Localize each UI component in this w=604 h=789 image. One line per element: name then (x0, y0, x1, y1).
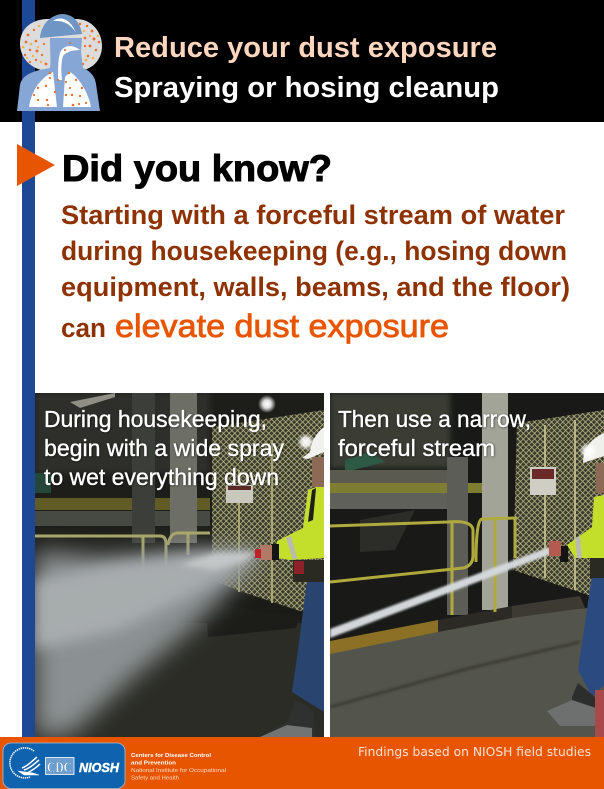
agency name text: Centers for Disease Control (131, 753, 211, 759)
header band (0, 0, 604, 122)
caption: narrow stream: forceful stream (338, 435, 495, 461)
text block: key message: Starting with a forceful stream of water (61, 200, 565, 230)
mesh fence (513, 410, 604, 595)
text block: key message (61, 200, 570, 344)
caption: narrow stream: Then use a narrow, (338, 406, 531, 432)
caption: narrow stream (338, 406, 531, 461)
arrow: orange triangle (17, 144, 55, 186)
text block: key message: can (61, 313, 106, 343)
water stream (330, 547, 551, 638)
CDC logo: CDC (47, 760, 72, 776)
caption: wide spray (44, 406, 284, 490)
agency name text: Safety and Health (131, 776, 179, 782)
yellow rail (35, 532, 210, 564)
rust board (330, 620, 438, 654)
logo panel: HHS, CDC, NIOSH (3, 743, 125, 788)
footer band (0, 737, 604, 789)
caption: wide spray: begin with a wide spray (44, 435, 284, 461)
text block: key message: during housekeeping (e.g., hosing down (61, 236, 567, 266)
icon: worker with dust in lungs (17, 14, 102, 111)
caption: wide spray: to wet everything down (44, 464, 279, 490)
text block: key message: elevate dust exposure (115, 308, 449, 344)
caption: wide spray: During housekeeping, (44, 406, 267, 432)
icon: HHS seal (10, 748, 40, 778)
agency name text: National Institute for Occupational (131, 768, 226, 774)
agency name text: and Prevention (131, 760, 177, 766)
yellow rail (330, 518, 515, 615)
source note: Findings based on NIOSH field studies (358, 744, 591, 759)
heading: did you know: Did you know? (62, 148, 332, 189)
danger sign (226, 485, 253, 503)
mesh fence (212, 410, 324, 611)
vertical blue bar (22, 0, 35, 737)
panel: photo narrow stream (330, 393, 604, 737)
water spray (35, 550, 258, 735)
NIOSH logo: NIOSH (79, 761, 120, 775)
heading: reduce your dust exposure: Reduce your dust exposure (114, 32, 497, 64)
lights (297, 433, 315, 451)
floor (330, 600, 604, 737)
headlamp (580, 442, 594, 458)
text block: key message: equipment, walls, beams, and the floor) (61, 272, 570, 302)
heading: spraying or hosing cleanup: Spraying or hosing cleanup (114, 72, 499, 104)
panel: photo wide spray (35, 393, 324, 737)
worker (578, 575, 604, 697)
danger sign (530, 467, 556, 495)
worker (292, 580, 324, 712)
agency name text (131, 753, 226, 782)
